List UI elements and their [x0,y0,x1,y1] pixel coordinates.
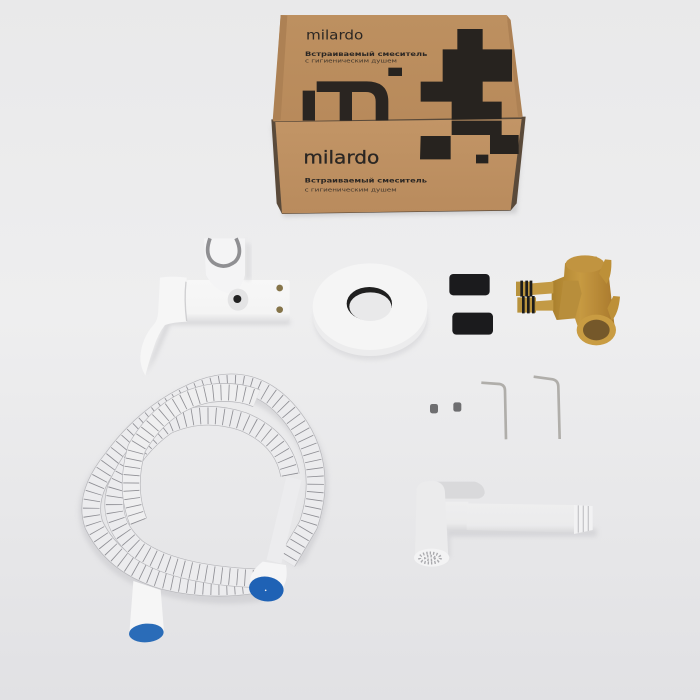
right connector stem [274,478,294,562]
front product title: Встраиваемый смеситель [305,177,427,185]
threaded end [574,505,593,534]
black sleeve bottom [452,313,493,335]
handle joint line [185,282,187,321]
holder grey clip [208,238,239,266]
hose strand outer [91,383,316,587]
hex key right [534,377,560,439]
large m logo [303,81,388,121]
lid product subtitle: с гигиеническим душем [305,59,397,65]
hose shadow [89,389,318,594]
box side edges [271,117,526,214]
hose strand middle [131,392,257,522]
front product subtitle: с гигиеническим душем [305,187,397,193]
outlet port [228,289,248,311]
shower hose [89,383,318,644]
lid brand name: milardo [306,28,363,43]
spray face [414,549,449,567]
lid flaps [273,15,523,121]
box shadow [272,120,523,217]
set screw left [430,404,438,413]
product box [271,15,526,217]
small parts [430,255,620,439]
holder neck shadow [245,242,251,280]
hose strand inner [114,416,290,578]
brass valve [516,255,620,345]
box lid [273,15,522,121]
cylinder body [186,280,290,322]
bidet sprayer [414,481,597,567]
sprayer head [415,481,448,557]
lid logo dot [388,68,402,76]
sprayer shadow [445,528,597,560]
brass screw bottom [276,306,283,313]
lever handle [140,277,187,376]
sprayer neck [443,502,468,530]
hose strands [91,383,316,587]
holder neck [204,238,245,293]
lid product title: Встраиваемый смеситель [305,50,427,58]
set screw right [453,402,461,412]
lid pixel pattern [421,29,512,121]
sprayer tube [467,503,575,533]
trigger lever [435,482,485,499]
box front [275,119,522,213]
mixer body with handle and holder [140,238,427,376]
left hose connector [128,581,164,644]
hex key left [481,383,506,439]
black sleeve top [449,274,490,295]
brass screw top [276,285,283,291]
escutcheon ring [313,263,427,360]
front pixel pattern [420,121,519,163]
front brand name: milardo [303,148,379,168]
mixer shadow [145,320,290,375]
right hose connector [247,562,287,604]
